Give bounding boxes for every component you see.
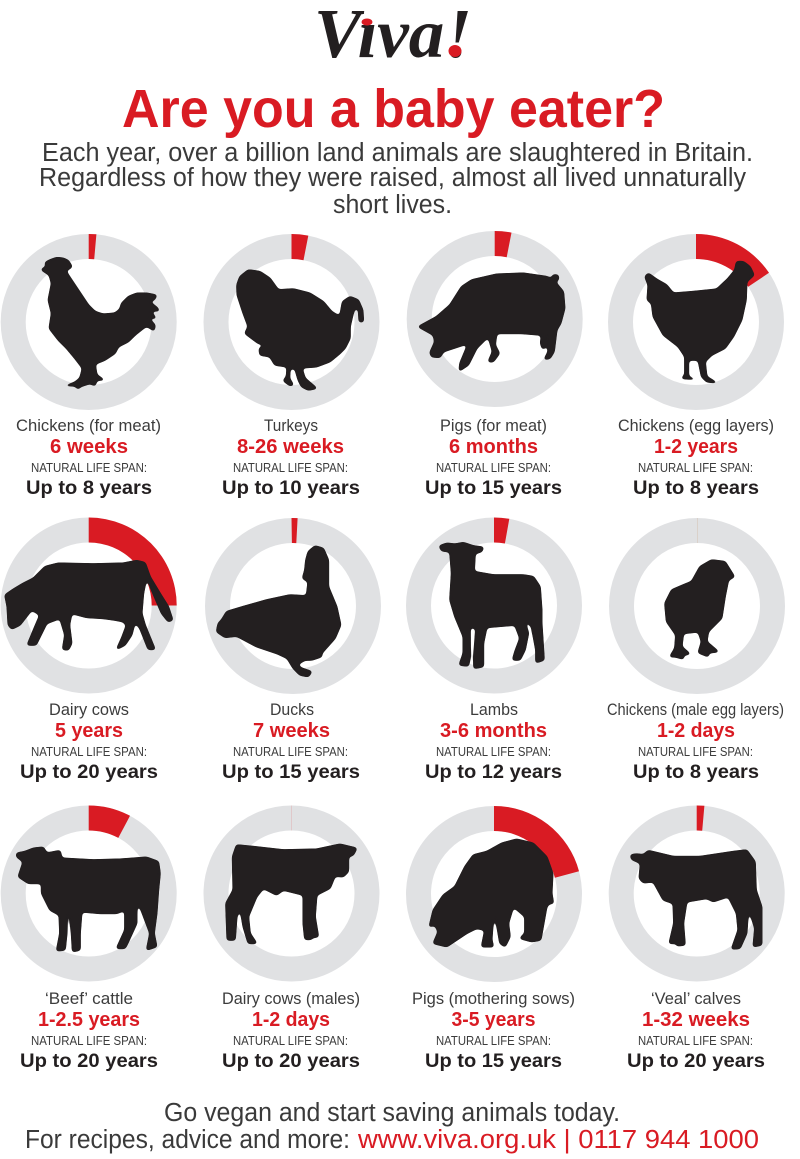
icon: lamb — [439, 543, 544, 668]
label texts: 1-2 days — [252, 1009, 330, 1031]
label texts: 8-26 weeks — [237, 436, 344, 458]
title: Are you a baby eater? — [122, 79, 665, 139]
ring chart: 1-2 years of 8 years — [620, 234, 772, 398]
ring chart: 6 weeks of 8 years — [13, 234, 164, 398]
panel: lambs — [418, 517, 570, 783]
label texts: NATURAL LIFE SPAN: — [436, 745, 551, 759]
label texts: Up to 15 years — [222, 761, 360, 783]
label texts — [222, 701, 360, 783]
label texts: NATURAL LIFE SPAN: — [638, 461, 753, 475]
panel: pigs for meat — [418, 231, 570, 499]
label texts: 3-5 years — [452, 1009, 536, 1031]
label texts: 7 weeks — [253, 720, 330, 742]
footer call to action: www.viva.org.uk | 0117 944 1000 — [357, 1126, 759, 1154]
label texts: Up to 20 years — [20, 1050, 158, 1072]
icon: rooster — [41, 258, 159, 389]
label texts: Up to 12 years — [425, 761, 562, 783]
label texts: 1-2.5 years — [38, 1009, 140, 1031]
ring chart: 3-5 years of 15 years — [418, 806, 579, 970]
label texts: Up to 20 years — [222, 1050, 360, 1072]
ring chart: 1-2 days of 8 years — [622, 518, 772, 682]
label texts — [425, 417, 562, 499]
panel: dairy cows — [5, 518, 177, 783]
label texts: Chickens (for meat) — [16, 417, 161, 435]
ring chart: 1-32 weeks of 20 years — [621, 805, 772, 969]
label texts: 3-6 months — [440, 720, 547, 742]
label texts: Up to 15 years — [425, 1050, 562, 1072]
ring chart: 1-2.5 years of 20 years — [13, 806, 164, 969]
panel: male chicks — [607, 518, 784, 783]
label texts: Up to 8 years — [26, 477, 152, 499]
label texts: NATURAL LIFE SPAN: — [31, 745, 147, 759]
label texts: Dairy cows — [49, 701, 129, 719]
label texts: NATURAL LIFE SPAN: — [436, 461, 551, 475]
icon: dairy cow — [5, 561, 173, 650]
label texts — [222, 417, 360, 499]
label texts: ‘Beef’ cattle — [45, 990, 133, 1008]
label texts: Up to 8 years — [633, 761, 759, 783]
label texts: 5 years — [55, 720, 123, 742]
panel: chickens egg layers — [618, 234, 774, 499]
icon: male dairy calf — [226, 844, 357, 943]
label texts — [222, 990, 360, 1072]
label texts: NATURAL LIFE SPAN: — [638, 1034, 753, 1048]
panel: veal calves — [621, 805, 772, 1072]
label texts: Dairy cows (males) — [222, 990, 360, 1008]
label texts: ‘Veal’ calves — [651, 990, 741, 1008]
ring chart: 3-6 months of 12 years — [418, 517, 570, 681]
label texts: Up to 10 years — [222, 477, 360, 499]
label texts: NATURAL LIFE SPAN: — [31, 461, 147, 475]
intro text — [39, 139, 753, 219]
icon: veal calf — [631, 850, 762, 949]
label texts: 1-2 years — [654, 436, 738, 458]
label texts: 1-2 days — [657, 720, 735, 742]
ring chart: 5 years of 20 years — [13, 518, 177, 681]
intro text: Regardless of how they were raised, almost all lived unnaturally — [39, 164, 746, 192]
icon: chick — [665, 560, 734, 659]
icon: beef cow — [17, 847, 160, 952]
panel: turkeys — [216, 234, 367, 499]
label texts: NATURAL LIFE SPAN: — [233, 745, 348, 759]
label texts: Up to 15 years — [425, 477, 562, 499]
intro text: Each year, over a billion land animals are slaughtered in Britain. — [42, 139, 753, 167]
icon: pig — [418, 273, 565, 371]
label texts — [607, 701, 784, 783]
icon: hen — [645, 262, 754, 383]
label texts: Chickens (egg layers) — [618, 417, 774, 435]
panel: chickens for meat — [13, 234, 164, 499]
label texts: Up to 20 years — [20, 761, 158, 783]
label texts — [618, 417, 774, 499]
label texts: Pigs (for meat) — [440, 417, 547, 435]
label texts — [20, 701, 158, 783]
footer call to action: Go vegan and start saving animals today. — [164, 1099, 620, 1127]
label texts: Up to 8 years — [633, 477, 759, 499]
label texts — [16, 417, 161, 499]
label texts — [412, 990, 575, 1072]
intro text: short lives. — [333, 191, 452, 219]
label texts: 1-32 weeks — [642, 1009, 750, 1031]
panel: beef cattle — [13, 806, 164, 1072]
label texts — [20, 990, 158, 1072]
label texts: Pigs (mothering sows) — [412, 990, 575, 1008]
label texts — [627, 990, 765, 1072]
icon: sow — [429, 839, 553, 947]
label texts: Ducks — [270, 701, 314, 719]
label texts: Turkeys — [264, 417, 318, 435]
label texts: NATURAL LIFE SPAN: — [31, 1034, 147, 1048]
label texts: Lambs — [470, 701, 518, 719]
footer call to action: For recipes, advice and more: — [25, 1126, 350, 1154]
label texts — [425, 701, 562, 783]
footer call to action — [25, 1099, 759, 1154]
icon: duck — [217, 546, 341, 677]
label texts: NATURAL LIFE SPAN: — [233, 1034, 348, 1048]
label texts: Up to 20 years — [627, 1050, 765, 1072]
ring chart: 1-2 days of 20 years — [216, 806, 367, 969]
ring chart: 8-26 weeks of 10 years — [216, 234, 367, 398]
ring chart: 7 weeks of 15 years — [218, 518, 368, 682]
label texts: 6 weeks — [50, 436, 128, 458]
label texts: NATURAL LIFE SPAN: — [233, 461, 348, 475]
label texts: NATURAL LIFE SPAN: — [436, 1034, 551, 1048]
ring chart: 6 months of 15 years — [419, 231, 570, 394]
panel: dairy cows males — [216, 806, 367, 1072]
panel: ducks — [217, 518, 368, 783]
label texts: NATURAL LIFE SPAN: — [638, 745, 753, 759]
icon: turkey — [237, 270, 363, 390]
panel: mothering sows — [412, 806, 579, 1072]
label texts: 6 months — [449, 436, 538, 458]
